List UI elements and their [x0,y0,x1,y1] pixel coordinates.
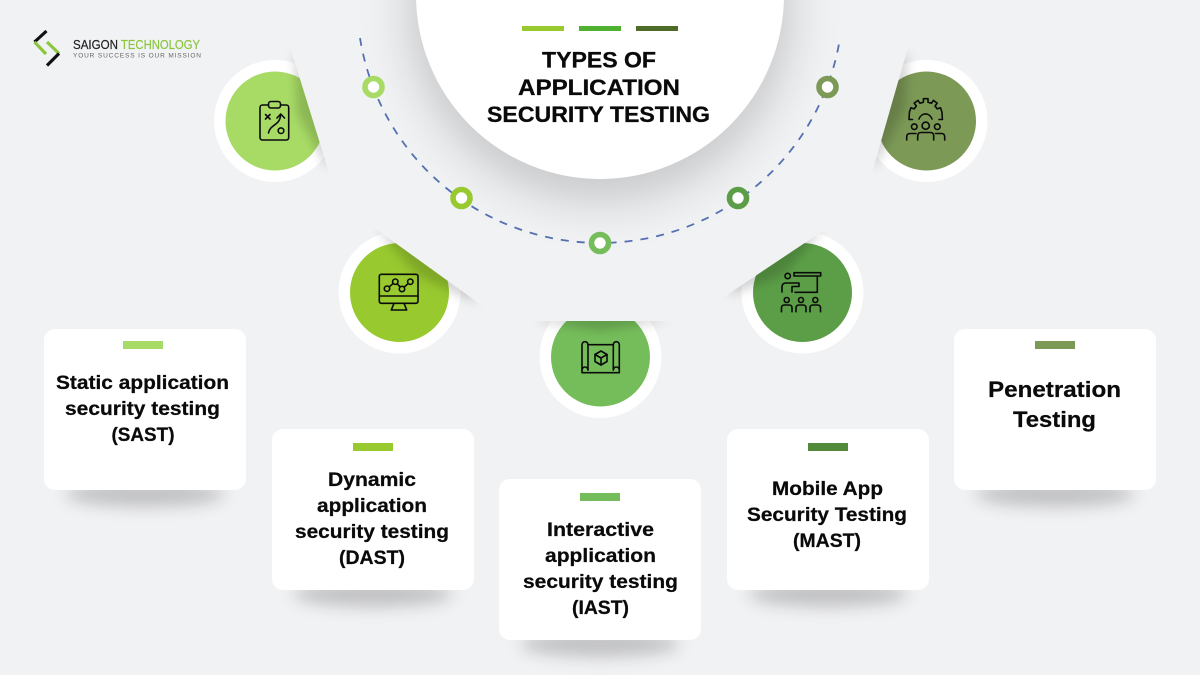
card text: Dynamic [328,469,416,491]
item circle 1 [214,60,336,182]
card: MAST [727,429,929,590]
card bar [580,493,620,501]
title: TYPES OF [542,48,656,72]
arc marker 5 [819,78,836,96]
card bar [123,341,163,349]
arc marker 1 [365,78,382,96]
central white circle [416,0,784,179]
card text: (DAST) [339,547,405,569]
item circle 3 [540,296,662,418]
card text [523,519,678,619]
logo: Saigon Technology [34,31,201,66]
card text: security testing [65,398,220,420]
title: SECURITY TESTING [487,102,710,127]
logo tagline: YOUR SUCCESS IS OUR MISSION [73,52,201,60]
card text: Penetration [988,377,1121,402]
icon: presenter with audience [782,273,821,312]
card text: Mobile App [772,478,883,500]
card shadows [65,481,1135,657]
card text: (MAST) [793,530,861,552]
item circle 5 [866,60,988,182]
card: Penetration Testing [954,329,1156,490]
card text [747,478,907,552]
arc marker 4 [730,190,746,206]
icon: gear with team [907,99,945,140]
card: DAST [272,429,474,590]
card text: application [317,495,427,517]
card text: Static application [56,372,229,394]
icon: clipboard strategy [260,102,289,140]
card text: security testing [295,521,449,543]
icon: monitor chart [379,274,418,310]
card text: security testing [523,571,678,593]
card bar [808,443,848,451]
title: APPLICATION [518,75,680,100]
title [487,48,710,127]
card text [295,469,449,569]
card text [988,377,1121,432]
card: IAST [499,479,701,640]
card text: (SAST) [112,424,174,446]
card text: Interactive [547,519,654,541]
fan edge shadows [294,50,908,331]
title accent bars [522,26,678,31]
dashed arc [360,38,840,243]
card: SAST [44,329,246,490]
logo wordmark accent: TECHNOLOGY [121,37,200,52]
arc marker 2 [453,190,470,206]
card text: Security Testing [747,504,907,526]
card text: (IAST) [572,597,629,619]
arc marker 3 [592,234,608,252]
card text: application [545,545,656,567]
logo mark [34,31,59,66]
logo wordmark: SAIGON [73,37,118,52]
icon: blueprint cube [582,342,619,373]
central circle shadow [410,0,790,200]
card bar [353,443,393,451]
item circle 2 [338,232,460,354]
item circle 4 [742,232,864,354]
card bar [1035,341,1075,349]
card text: Testing [1013,407,1096,432]
fan panel [274,0,923,321]
card text [56,372,229,446]
